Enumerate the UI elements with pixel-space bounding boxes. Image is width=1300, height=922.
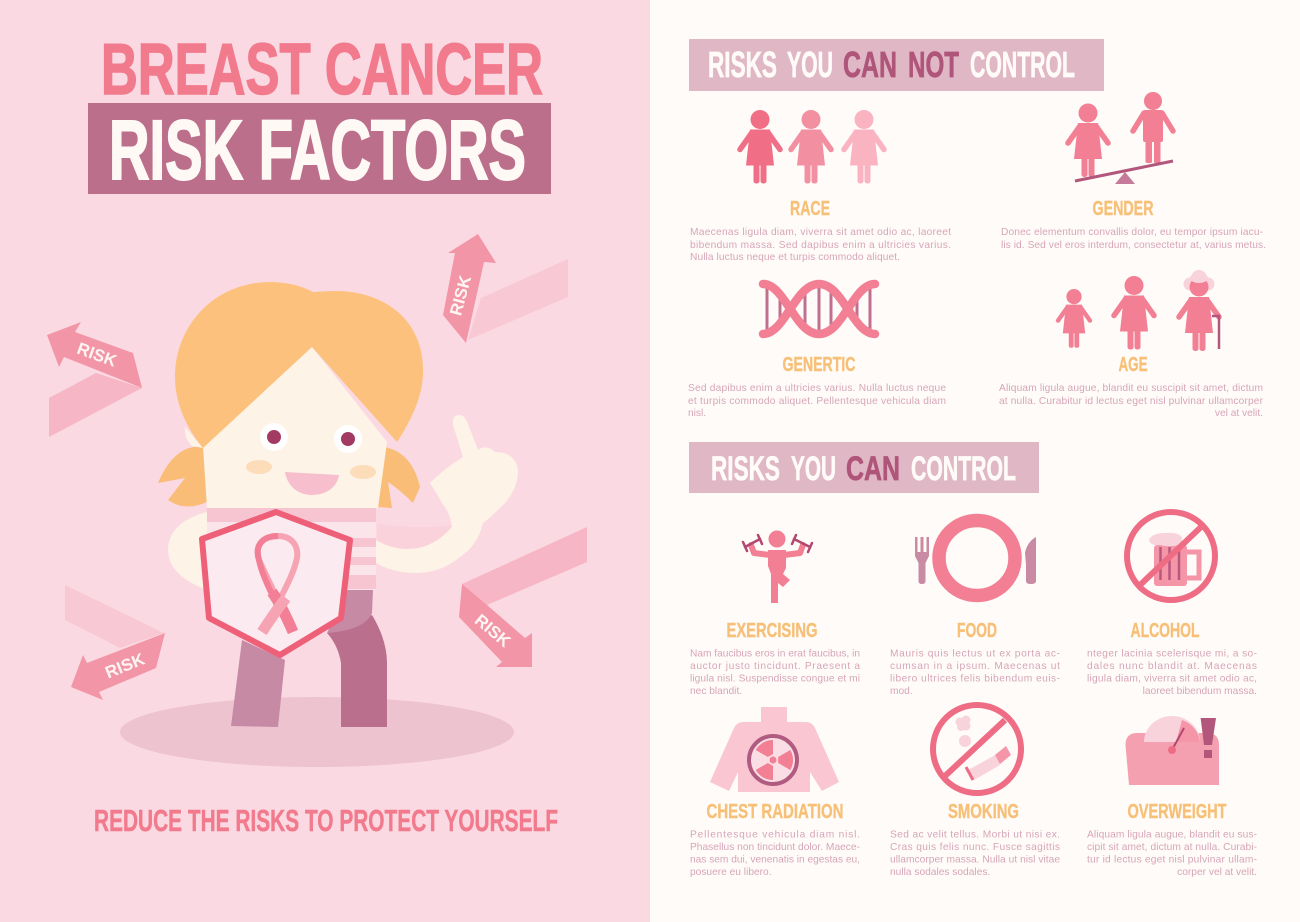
item: overweight <box>1087 716 1257 878</box>
text block: tur id lectus eget nisl pulvinar ullam- <box>1087 854 1257 866</box>
item: food <box>890 520 1060 697</box>
panel: right background <box>650 0 1300 922</box>
text block: Nam faucibus eros in erat faucibus, in <box>690 648 860 660</box>
icon: sweater with radiation sign <box>710 707 839 792</box>
label: GENDER <box>1092 197 1154 220</box>
icon: three women <box>740 110 884 184</box>
text block: auctor justo tincidunt. Praesent a <box>690 661 860 672</box>
text block: ligula nisl. Suspendisse congue et mi <box>690 674 860 684</box>
ground shadow <box>120 697 514 767</box>
text block: at nulla. Curabitur id lectus eget nisl pulvinar ullamcorper <box>999 396 1264 407</box>
pink ribbon <box>258 536 297 632</box>
text block: et turpis commodo aliquet. Pellentesque vehicula diam <box>688 396 946 407</box>
label: ALCOHOL <box>1130 619 1200 642</box>
arrow: risk upper right <box>443 234 568 343</box>
arrow: risk lower left: RISK <box>103 649 148 682</box>
arrow: risk upper left <box>47 322 142 437</box>
arrow: risk lower left <box>65 585 165 700</box>
text block: posuere eu libero. <box>690 867 772 878</box>
text block: cumsan in a ipsum. Maecenas ut <box>890 661 1060 672</box>
mouth <box>285 472 339 495</box>
character: girl with shield <box>120 282 518 767</box>
heading: breast cancer: BREAST CANCER <box>101 30 543 110</box>
label: OVERWEIGHT <box>1128 800 1227 823</box>
item: genetic <box>688 284 946 419</box>
left arm <box>168 512 207 590</box>
icon: seesaw with woman and man <box>1068 92 1173 184</box>
icon: DNA helix <box>763 284 875 334</box>
text block: Aliquam ligula augue, blandit eu suscipit sit amet, dictum <box>999 383 1263 394</box>
heading: risk factors: RISK FACTORS <box>109 103 526 197</box>
arrow: risk upper left: RISK <box>75 339 120 371</box>
text block: Mauris quis lectus ut ex porta ac- <box>890 648 1060 660</box>
sleeve shade <box>377 524 452 549</box>
text block: vel at velit. <box>1215 408 1263 419</box>
text block <box>690 227 951 263</box>
text block: lis id. Sed vel eros interdum, consectetur at, varius metus. <box>1001 240 1266 251</box>
eyes <box>260 423 362 453</box>
item: exercising <box>690 530 860 697</box>
text block <box>690 648 860 697</box>
text block <box>1001 227 1266 251</box>
text block: Pellentesque vehicula diam nisl. <box>690 830 860 840</box>
arrow: risk upper right: RISK <box>446 273 475 318</box>
section banner: risks you can control: CONTROL <box>911 450 1016 488</box>
item: gender <box>1001 92 1266 251</box>
label: EXERCISING <box>726 619 818 642</box>
text block: bibendum massa. Sed dapibus enim a ultricies varius. <box>690 240 951 251</box>
text block: Aliquam ligula augue, blandit eu sus- <box>1087 830 1257 840</box>
shield <box>202 512 350 655</box>
icon: scale with warning <box>1126 716 1219 785</box>
section banner: risks you can not control: RISKS <box>708 44 777 85</box>
text block: Phasellus non tincidunt dolor. Maece- <box>690 842 860 853</box>
text block: libero ultrices felis bibendum euis- <box>890 674 1060 684</box>
text block: nteger lacinia scelerisque mi, a so- <box>1087 648 1257 660</box>
label: CHEST RADIATION <box>706 800 844 823</box>
arrow: risk lower right <box>459 527 587 667</box>
item: chest radiation <box>690 707 860 878</box>
text block: corper vel at velit. <box>1177 867 1257 878</box>
item: race <box>690 110 951 263</box>
title bar <box>88 103 551 194</box>
label: RACE <box>790 197 830 220</box>
arrow: risk lower right: RISK <box>471 610 515 652</box>
section banner: risks you can not control <box>689 39 1104 91</box>
text block <box>890 648 1060 697</box>
text block: ullamcorper massa. Nulla ut nisl vitae <box>890 854 1060 866</box>
text block <box>890 830 1060 878</box>
item: smoking <box>890 705 1060 878</box>
item: alcohol <box>1087 512 1257 697</box>
text block <box>688 383 946 419</box>
text block: Sed ac velit tellus. Morbi ut nisi ex. <box>890 830 1060 840</box>
pigtails <box>158 447 207 507</box>
text block: laoreet bibendum massa. <box>1143 686 1257 697</box>
section banner: risks you can not control: CONTROL <box>970 44 1075 85</box>
icon: plate fork knife <box>915 520 1036 596</box>
icon: child, adult, grandmother <box>1058 270 1219 351</box>
text block <box>999 383 1264 419</box>
text block: Maecenas ligula diam, viverra sit amet odio ac, laoreet <box>690 227 951 238</box>
text block: ligula diam, viverra sit amet odio ac, <box>1087 674 1257 684</box>
hair <box>175 282 423 448</box>
icon: no smoking <box>933 705 1021 793</box>
icon: figure with dumbbells <box>743 530 812 603</box>
text block: mod. <box>890 686 913 697</box>
label: AGE <box>1118 353 1148 376</box>
text block: cipit sit amet, dictum at nulla. Curabi- <box>1087 842 1257 853</box>
face <box>203 347 387 508</box>
text block: nas sem dui, venenatis in egestas eu, <box>690 854 860 866</box>
section banner: risks you can control: YOU <box>791 450 836 488</box>
section banner: risks you can control: CAN <box>846 450 900 488</box>
text block: Nulla luctus neque et turpis commodo aliquet. <box>690 252 900 263</box>
section banner: risks you can control <box>689 442 1039 493</box>
slogan: REDUCE THE RISKS TO PROTECT YOURSELF <box>94 803 558 838</box>
text block: Sed dapibus enim a ultricies varius. Nulla luctus neque <box>688 383 946 394</box>
striped shirt <box>207 507 376 590</box>
text block: Donec elementum convallis dolor, eu tempor ipsum iacu- <box>1001 227 1263 238</box>
section banner: risks you can not control: CAN <box>843 44 897 85</box>
label: FOOD <box>957 619 997 642</box>
ear <box>185 427 203 448</box>
text block: nisl. <box>688 408 706 419</box>
text block: dales nunc blandit at. Maecenas <box>1087 661 1257 672</box>
text block <box>690 830 860 878</box>
label: GENERTIC <box>782 353 856 376</box>
cheeks <box>246 460 376 479</box>
text block: nec blandit. <box>690 686 742 697</box>
item: age <box>999 270 1264 419</box>
panel: left background <box>0 0 650 922</box>
section banner: risks you can not control: YOU <box>787 44 833 85</box>
text block <box>1087 830 1257 878</box>
text block: nulla sodales sodales. <box>890 867 990 878</box>
pants <box>231 590 387 727</box>
icon: no beer <box>1127 512 1215 600</box>
title <box>88 30 551 197</box>
raised right arm and hand <box>376 415 518 573</box>
text block <box>1087 648 1257 697</box>
label: SMOKING <box>948 800 1019 823</box>
section banner: risks you can control: RISKS <box>711 450 780 488</box>
section banner: risks you can not control: NOT <box>908 44 959 85</box>
text block: Cras quis felis nunc. Fusce sagittis <box>890 842 1060 853</box>
